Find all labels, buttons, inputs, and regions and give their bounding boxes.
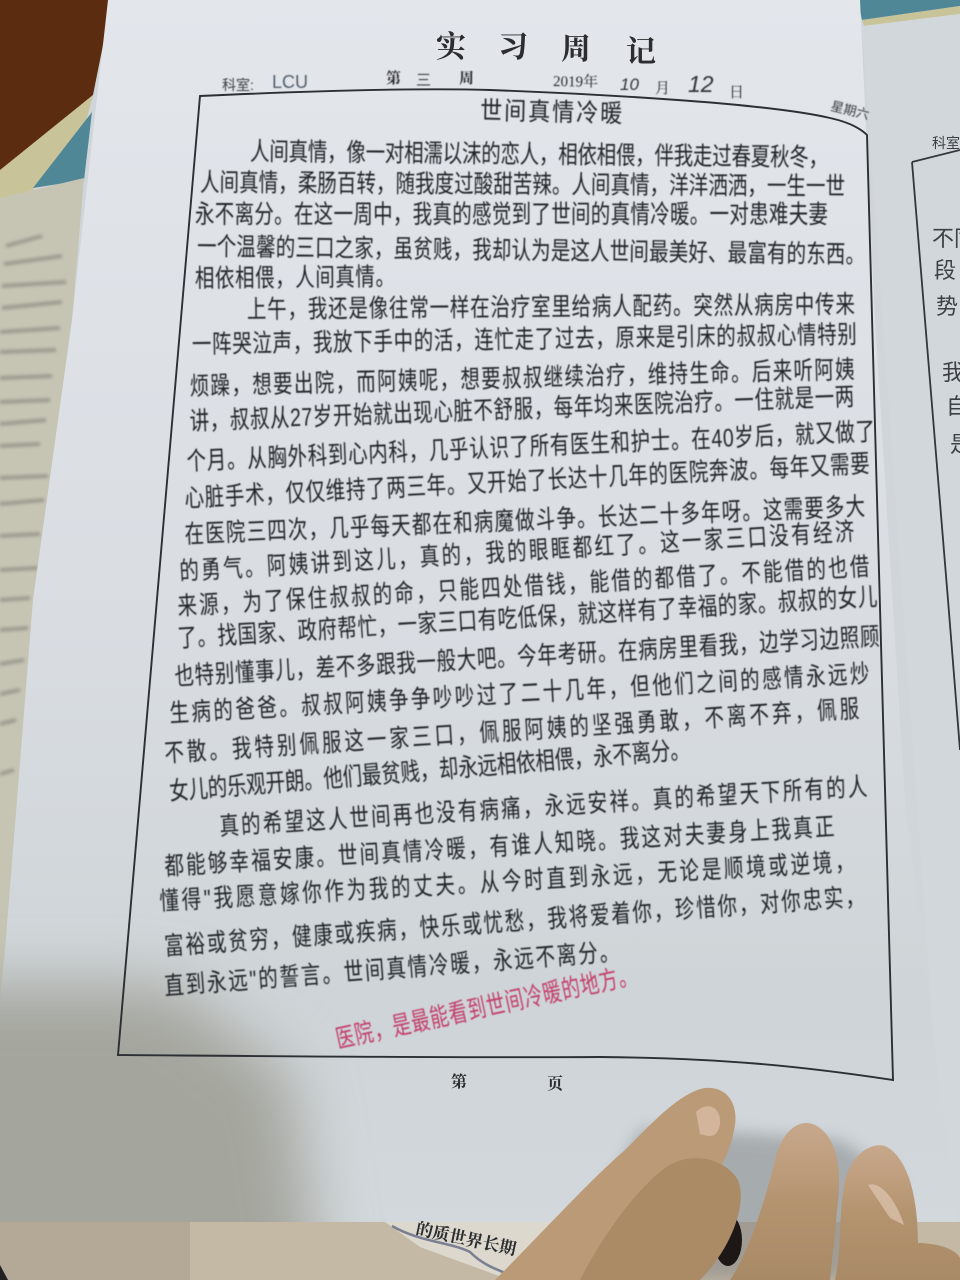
paragraph 2: 讲，叔叔从27岁开始就出现心脏不舒服，每年均来医院治疗。一住就是一两	[189, 383, 855, 436]
form header row: 10	[620, 75, 639, 94]
paragraph 1: 人间真情，柔肠百转，随我度过酸甜苦辣。人间真情，洋洋洒洒，一生一世	[200, 169, 845, 201]
footer page label: 页	[547, 1074, 563, 1093]
paragraph 3: 懂得"我愿意嫁你作为我的丈夫。从今时直到永远，无论是顺境或逆境，	[159, 848, 855, 916]
heading: 实习周记: 周	[561, 33, 591, 66]
paragraph 2: 的勇气。阿姨讲到这儿，真的，我的眼眶都红了。这一家三口没有经济	[179, 518, 855, 586]
form header row: 2019年	[553, 72, 598, 91]
paragraph 2: 一阵哭泣声，我放下手中的活，连忙走了过去，原来是引床的叔叔心情特别	[192, 321, 857, 359]
handwritten essay	[159, 97, 880, 1054]
paragraph 3	[159, 773, 868, 1001]
paragraph 2	[164, 291, 880, 806]
surface below page with map fragment	[0, 1218, 960, 1280]
finger 2	[580, 1158, 741, 1280]
finger 4	[835, 1145, 960, 1280]
paragraph 2: 心脏手术，仅仅维持了两三年。又开始了长达十几年的医院奔波。每年又需要	[184, 450, 870, 513]
paragraph 2: 在医院三四次，几乎每天都在和病魔做斗争。长达二十多年呀。这需要多大	[184, 493, 866, 549]
paragraph 2: 不散。我特别佩服这一家三口，佩服阿姨的坚强勇敢，不离不弃，佩服	[164, 695, 860, 768]
paragraph 1: 永不离分。在这一周中，我真的感觉到了世间的真情冷暖。一对患难夫妻	[195, 201, 828, 229]
form header row: 月	[655, 80, 670, 97]
right neighbouring page	[862, 14, 960, 1240]
paragraph 2: 生病的爸爸。叔叔阿姨争争吵吵过了二十几年，但他们之间的感情永远炒	[169, 660, 870, 728]
form header row: 星期六	[829, 98, 871, 122]
paragraph 3: 都能够幸福安康。世间真情冷暖，有谁人知晓。我这对夫妻身上我真正	[164, 813, 835, 881]
right neighbouring page: 段	[934, 258, 956, 283]
form header row: 三	[416, 72, 431, 89]
paragraph 2: 来源，为了保住叔叔的命，只能四处借钱，能借的都借了。不能借的也借	[177, 553, 870, 621]
fingernail 4	[868, 1184, 904, 1225]
paragraph 3: 真的希望这人世间再也没有病痛，永远安祥。真的希望天下所有的人	[219, 773, 868, 841]
form header row: LCU	[272, 72, 308, 92]
paragraph 1	[195, 138, 865, 293]
paragraph 2: 了。找国家、政府帮忙，一家三口有吃低保，就这样有了幸福的家。叔叔的女儿	[177, 583, 878, 653]
form header row: 12	[688, 71, 714, 97]
heading: 实习周记: 习	[498, 31, 528, 64]
left book printed text	[0, 236, 66, 774]
paragraph 2: 上午，我还是像往常一样在治疗室里给病人配药。突然从病房中传来	[247, 291, 855, 324]
form header row: 日	[729, 84, 744, 101]
paragraph 3: 富裕或贫穷，健康或疾病，快乐或忧愁，我将爱着你，珍惜你，对你忠实，	[163, 883, 866, 961]
paragraph 1: 相依相偎，人间真情。	[195, 263, 395, 293]
icon: hand with fingers	[495, 1088, 960, 1280]
red teacher comment: 医院，是最能看到世间冷暖的地方。	[333, 961, 639, 1054]
footer page label	[451, 1073, 563, 1093]
finger 1	[495, 1088, 736, 1280]
paragraph 3: 直到永远"的誓言。世间真情冷暖，永远不离分。	[163, 938, 620, 1001]
essay title: 世间真情冷暖	[480, 97, 622, 129]
paragraph 1: 人间真情，像一对相濡以沫的恋人，相依相偎，伴我走过春夏秋冬，	[250, 138, 828, 172]
right neighbouring page: 势	[936, 294, 958, 319]
footer page label: 第	[451, 1073, 467, 1091]
finger shadow	[560, 1130, 900, 1280]
heading: 实习周记: 记	[626, 36, 656, 69]
fingernail 1	[696, 1106, 720, 1136]
paragraph 2: 烦躁，想要出院，而阿姨呢，想要叔叔继续治疗，维持生命。后来听阿姨	[189, 356, 855, 401]
paragraph 2: 女儿的乐观开朗。他们最贫贱，却永远相依相偎，永不离分。	[168, 736, 691, 806]
heading: 实习周记: 实	[436, 31, 467, 64]
finger 3	[730, 1123, 839, 1280]
heading: 实习周记	[436, 31, 656, 69]
paragraph 2: 也特别懂事儿，差不多跟我一般大吧。今年考研。在病房里看我，边学习边照顾	[174, 623, 880, 691]
form header row: 科室:	[222, 77, 254, 93]
paragraph 2: 个月。从胸外科到心内科，几乎认识了所有医生和护士。在40岁后，就又做了	[186, 418, 876, 476]
writing frame	[118, 89, 893, 1080]
form header row: 第	[386, 70, 401, 87]
form header row: 周	[459, 70, 474, 87]
paragraph 1: 一个温馨的三口之家，虽贫贱，我却认为是这人世间最美好、最富有的东西。	[197, 233, 865, 269]
right neighbouring page: 科室	[932, 135, 960, 151]
surface below page with map fragment: 的质世界长期	[414, 1218, 518, 1259]
form header row	[222, 70, 871, 122]
